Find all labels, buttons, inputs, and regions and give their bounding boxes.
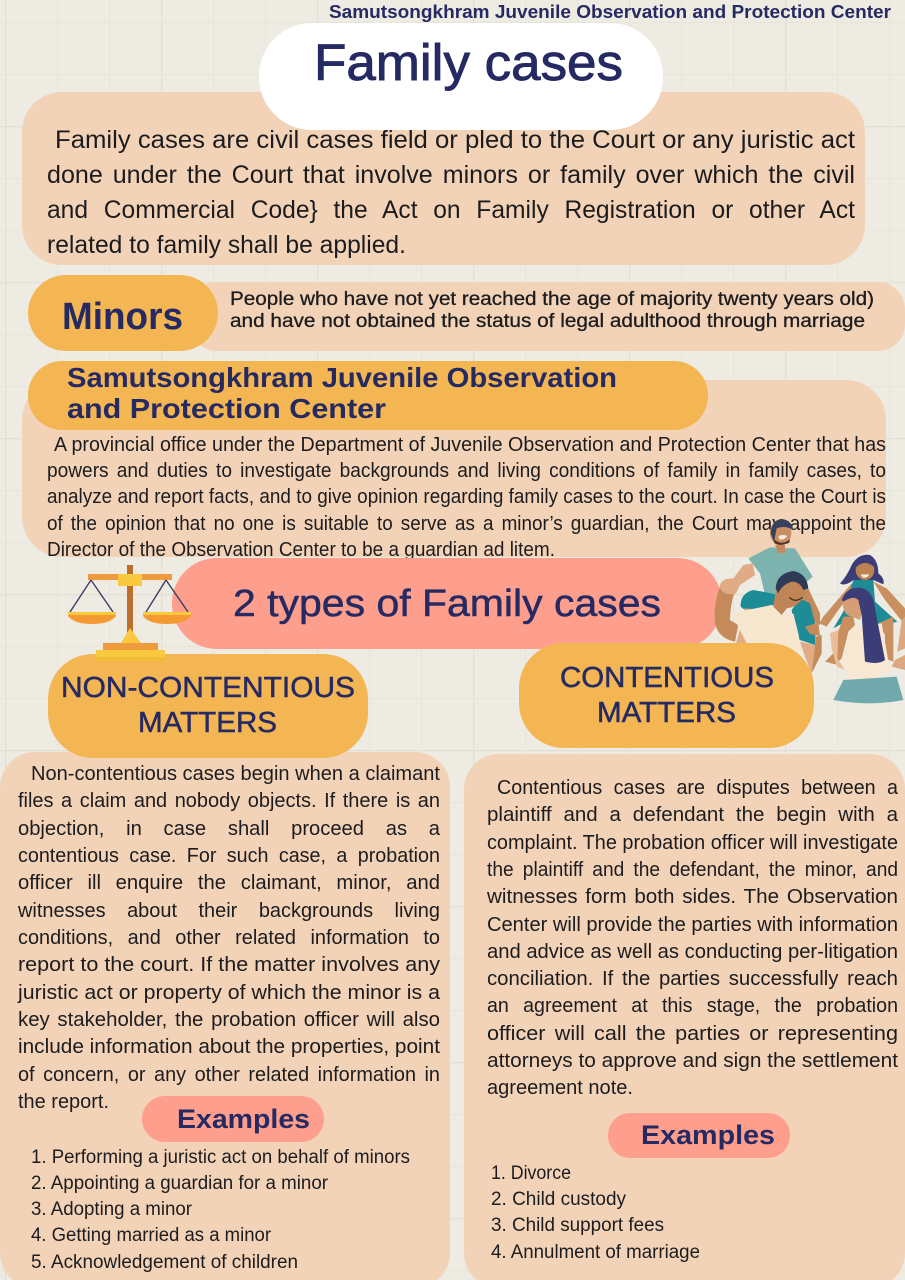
contentious description: Center will provide the parties with information [487, 914, 898, 936]
non-contentious description: contentious case. For such case, a probation [18, 845, 440, 867]
panel: observation center [22, 361, 886, 561]
minors label pill [28, 275, 218, 351]
contentious pill background [519, 643, 814, 748]
illustration: family [715, 519, 905, 703]
heading pill: 2 types [172, 558, 722, 649]
intro text: and Commercial Code} the Act on Family Registration or other Act [47, 196, 855, 224]
center description: Director of the Observation Center to be a guardian ad litem. [47, 539, 555, 561]
2 types pill background [172, 558, 722, 649]
intro text: related to family shall be applied. [47, 231, 406, 259]
scale base [121, 628, 141, 643]
contentious description: Contentious cases are disputes between a [497, 777, 899, 799]
contentious description: agreement note. [487, 1077, 633, 1099]
contentious description [486, 777, 899, 1099]
center heading: and Protection Center [67, 393, 386, 424]
contentious description: and advice as well as conducting per-litigation [487, 941, 898, 963]
heading pill: non-contentious matters [48, 654, 368, 758]
non-contentious description: key stakeholder, the probation officer will also [18, 1009, 440, 1031]
icon: scales of justice [68, 565, 191, 661]
center heading pill [28, 361, 708, 430]
scale strings [70, 580, 188, 612]
intro text: Family cases are civil cases field or pled to the Court or any juristic act [55, 126, 855, 154]
center description: powers and duties to investigate backgrounds and living conditions of family in family cases, to [47, 460, 886, 482]
father and son [715, 519, 822, 673]
scale beam [88, 574, 172, 580]
non-contentious description: officer ill enquire the claimant, minor, and [18, 872, 440, 894]
left panel background [0, 752, 450, 1280]
examples pill background [142, 1096, 324, 1142]
header: organisation name: Samutsongkhram Juvenile Observation and Protection Center [329, 2, 891, 22]
minors definition: People who have not yet reached the age of majority twenty years old) [230, 289, 874, 310]
examples list: 4. Annulment of marriage [491, 1242, 700, 1263]
title pill background [259, 23, 663, 130]
minors definition background [190, 282, 905, 351]
non-contentious description: objection, in case shall proceed as a [18, 818, 441, 840]
contentious description: witnesses form both sides. The Observation [486, 886, 898, 908]
center description: A provincial office under the Department of Juvenile Observation and Protection Center that has [54, 434, 886, 456]
non-contentious heading: MATTERS [138, 707, 277, 739]
non-contentious description: juristic act or property of which the minor is a [17, 982, 441, 1004]
examples label: Examples [177, 1104, 310, 1134]
non-contentious description [17, 763, 441, 1113]
mother and daughter [819, 555, 905, 703]
intro panel background [22, 92, 865, 265]
examples list: 5. Acknowledgement of children [31, 1252, 298, 1273]
non-contentious description: Non-contentious cases begin when a claimant [31, 763, 440, 785]
intro text [47, 126, 855, 259]
examples pill [608, 1113, 790, 1158]
examples list [31, 1147, 410, 1273]
non-contentious pill background [48, 654, 368, 758]
non-contentious heading: NON-CONTENTIOUS [61, 672, 355, 704]
non-contentious description: files a claim and nobody objects. If there is an [18, 790, 440, 812]
examples list: 3. Child support fees [491, 1215, 664, 1236]
minors definition [230, 289, 874, 332]
contentious description: the plaintiff and the defendant, the minor, and [487, 859, 898, 881]
contentious heading: MATTERS [597, 697, 736, 729]
panel: contentious cases [464, 754, 905, 1280]
panel: non-contentious cases [0, 752, 450, 1280]
contentious description: an agreement at this stage, the probation [487, 995, 898, 1017]
heading pill: contentious matters [519, 643, 814, 748]
non-contentious description: of concern, or any other related information in [18, 1064, 440, 1086]
examples list: 2. Appointing a guardian for a minor [31, 1173, 329, 1194]
examples label: Examples [641, 1120, 775, 1150]
right pan [143, 612, 191, 624]
minors definition: and have not obtained the status of legal adulthood through marriage [230, 311, 865, 332]
right panel background [464, 754, 905, 1280]
minors label: Minors [62, 296, 183, 338]
left pan [68, 612, 116, 624]
2 types heading: 2 types of Family cases [233, 583, 661, 625]
center heading [67, 362, 617, 424]
center heading: Samutsongkhram Juvenile Observation [67, 362, 617, 393]
contentious description: conciliation. If the parties successfully reach [487, 968, 898, 990]
examples pill background [608, 1113, 790, 1158]
scale post [127, 565, 133, 633]
panel: introduction [22, 92, 865, 265]
examples list [491, 1163, 700, 1263]
contentious description: officer will call the parties or representing [487, 1023, 898, 1045]
non-contentious description: witnesses about their backgrounds living [17, 900, 440, 922]
contentious heading [560, 662, 774, 729]
intro text: done under the Court that involve minors or family over which the civil [47, 161, 855, 189]
examples list: 2. Child custody [491, 1189, 626, 1210]
examples list: 1. Divorce [491, 1163, 571, 1184]
examples pill [142, 1096, 324, 1142]
non-contentious description: conditions, and other related information to [18, 927, 440, 949]
contentious description: plaintiff and a defendant the begin with a [487, 804, 899, 826]
contentious heading: CONTENTIOUS [560, 662, 774, 694]
title pill [259, 23, 663, 130]
contentious description: complaint. The probation officer will investigate [487, 832, 898, 854]
center description [47, 434, 886, 561]
examples list: 3. Adopting a minor [31, 1199, 193, 1220]
non-contentious description: report to the court. If the matter involves any [18, 954, 440, 976]
non-contentious heading [61, 672, 355, 739]
examples list: 1. Performing a juristic act on behalf of minors [31, 1147, 410, 1168]
non-contentious description: the report. [18, 1091, 109, 1113]
contentious description: attorneys to approve and sign the settlement [487, 1050, 898, 1072]
non-contentious description: include information about the properties, point [18, 1036, 440, 1058]
title: Family cases [314, 34, 623, 91]
center panel background [22, 380, 886, 557]
examples list: 4. Getting married as a minor [31, 1225, 272, 1246]
panel: minors [28, 275, 905, 351]
